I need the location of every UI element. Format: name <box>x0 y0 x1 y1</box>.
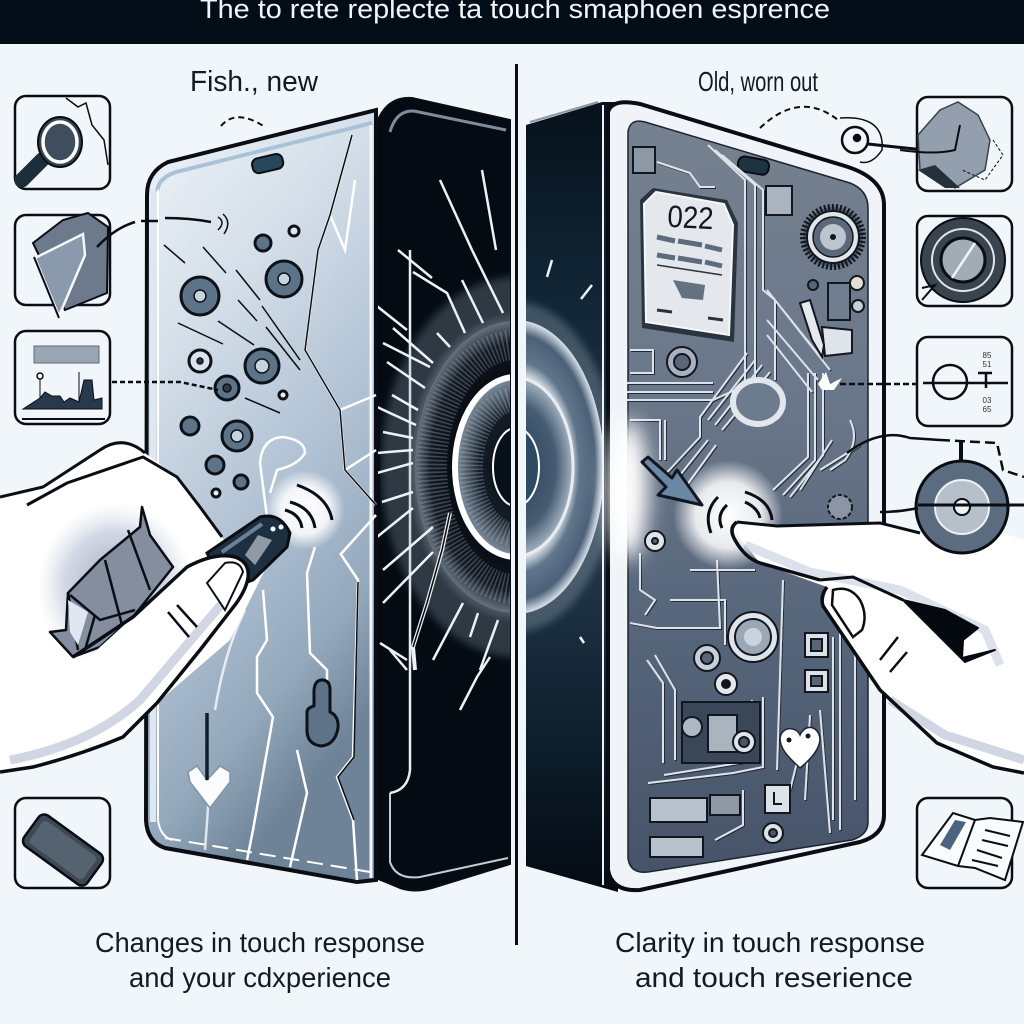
right caption: and touch reserience <box>635 962 913 993</box>
dashed connector left <box>112 382 218 390</box>
speaker notch <box>251 153 284 174</box>
icon: lens panel <box>917 216 1012 306</box>
icon: gauge panel <box>917 337 1012 426</box>
icon: gauge panel: 51 <box>983 360 992 369</box>
left hand <box>0 443 290 772</box>
icon: shield panel <box>15 213 110 318</box>
icon: target connector right <box>840 118 953 162</box>
dashed arrow to waves <box>97 214 228 247</box>
small components <box>633 147 864 857</box>
panel: left phone front <box>146 110 376 882</box>
shockwave rings right <box>526 300 602 634</box>
panel: left black phone back <box>378 96 511 892</box>
tap glow right <box>673 460 783 570</box>
icon: touch waves right <box>708 492 772 533</box>
icon: heart <box>188 766 230 808</box>
icon: torn cloth panel <box>900 97 1012 191</box>
dashed arc right <box>760 107 838 128</box>
camera lens <box>803 207 863 267</box>
thumb <box>0 556 248 772</box>
hand shading <box>745 545 1000 665</box>
dashed connector right <box>822 383 916 385</box>
left caption: Changes in touch response <box>95 927 425 958</box>
icon: magnifier panel <box>15 96 110 189</box>
status card: 022 <box>667 199 714 236</box>
icon: stylus <box>207 516 290 590</box>
cracks radiating on black panel <box>373 170 503 710</box>
right hand <box>732 522 1024 773</box>
right caption: Clarity in touch response <box>615 927 925 958</box>
hand shading <box>37 503 193 667</box>
icon: book panel <box>917 798 1023 888</box>
status card <box>640 188 738 342</box>
ring component <box>733 380 783 424</box>
tap glow <box>265 470 345 550</box>
left caption: and your cdxperience <box>129 962 391 993</box>
icon: chart panel <box>15 331 110 424</box>
speaker <box>737 156 770 176</box>
right heading: Old, worn out <box>698 66 818 97</box>
icon: heart right <box>780 727 820 768</box>
crack lines <box>205 135 376 880</box>
dashed arc left <box>221 117 265 127</box>
spark <box>818 372 842 390</box>
icon: arrow pointing to touch <box>642 457 702 505</box>
title bar <box>0 0 1024 44</box>
right caption <box>615 927 925 993</box>
icon: gauge panel: 85 <box>983 351 992 360</box>
water drops and buttons <box>181 226 302 497</box>
web between thumb and finger <box>50 507 173 657</box>
icon: gauge panel: 65 <box>983 405 992 414</box>
icon: lock shape <box>307 680 338 746</box>
icon: phone panel <box>15 798 110 888</box>
icon: gauge panel: 03 <box>983 396 992 405</box>
divider <box>515 64 518 945</box>
icon: dial <box>847 435 1024 553</box>
panel: right phone front <box>608 102 884 890</box>
shockwave rings left <box>380 274 510 660</box>
panel: right black phone back <box>526 101 618 892</box>
left heading: Fish., new <box>190 66 319 98</box>
icon: touch waves left <box>285 485 332 528</box>
circuit traces <box>627 145 860 840</box>
stray crack dashes <box>164 245 300 413</box>
screen fade near hand <box>608 420 648 560</box>
down arrow <box>205 713 209 780</box>
left caption <box>95 927 425 993</box>
